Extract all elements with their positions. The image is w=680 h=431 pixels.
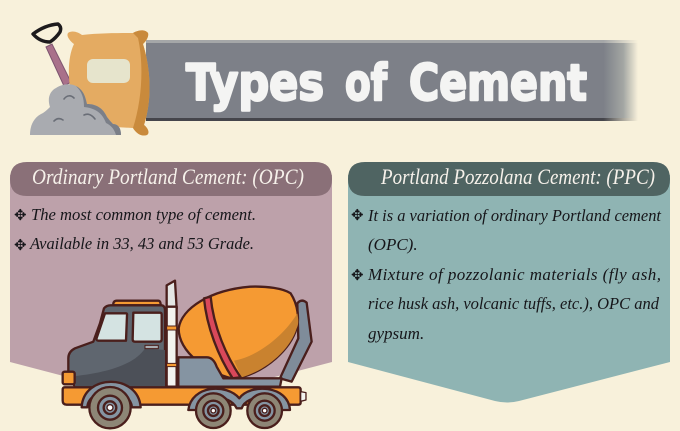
bullet text: mixture: ✥ <box>351 266 364 284</box>
panel: OPC <box>10 162 332 402</box>
exhaust stack <box>167 281 177 387</box>
title: Types <box>186 54 324 112</box>
mixer rear support <box>280 301 312 382</box>
title banner <box>146 40 638 121</box>
title: of <box>345 54 388 112</box>
wheel arches <box>82 382 141 407</box>
bullet text: mixture: gypsum. <box>368 324 424 343</box>
wheel middle <box>196 393 231 428</box>
bullet text: grades: Available in 33, 43 and 53 Grade. <box>29 234 254 253</box>
panel body: OPC <box>10 175 332 402</box>
chassis <box>63 387 301 405</box>
bullet text: grades: ✥ <box>14 236 27 254</box>
bullet text: variation <box>351 206 662 254</box>
wheel front <box>89 387 131 428</box>
panel header: PPC <box>348 162 670 196</box>
cab <box>68 301 165 387</box>
title: Cement <box>409 54 587 112</box>
bullet text: variation: It is a variation of ordinary Portland cement <box>367 206 662 225</box>
bullet text: variation: ✥ <box>351 206 364 224</box>
mixer drum <box>179 287 298 378</box>
bullet text: most common: ✥ <box>14 206 27 224</box>
icon: cement bag <box>67 30 150 136</box>
bullet text: variation: (OPC). <box>368 235 418 254</box>
bullet text: most common: The most common type of cement. <box>31 205 256 224</box>
panel: PPC <box>348 162 670 402</box>
panel body: PPC <box>348 175 670 402</box>
bullet text: mixture <box>351 265 661 343</box>
truck bed <box>178 357 282 387</box>
bullet text: mixture: rice husk ash, volcanic tuffs, etc.), OPC and <box>368 294 659 313</box>
bullet text: mixture: Mixture of pozzolanic materials (fly ash, <box>367 265 661 284</box>
icon: shovel <box>33 24 71 86</box>
wheel rear <box>247 393 282 428</box>
headlight <box>63 372 75 384</box>
icon: concrete mixer truck <box>63 281 312 428</box>
panel header: OPC <box>10 162 332 196</box>
icon: cement pile <box>30 84 121 135</box>
heading: OPC: Ordinary Portland Cement: (OPC) <box>32 164 304 189</box>
